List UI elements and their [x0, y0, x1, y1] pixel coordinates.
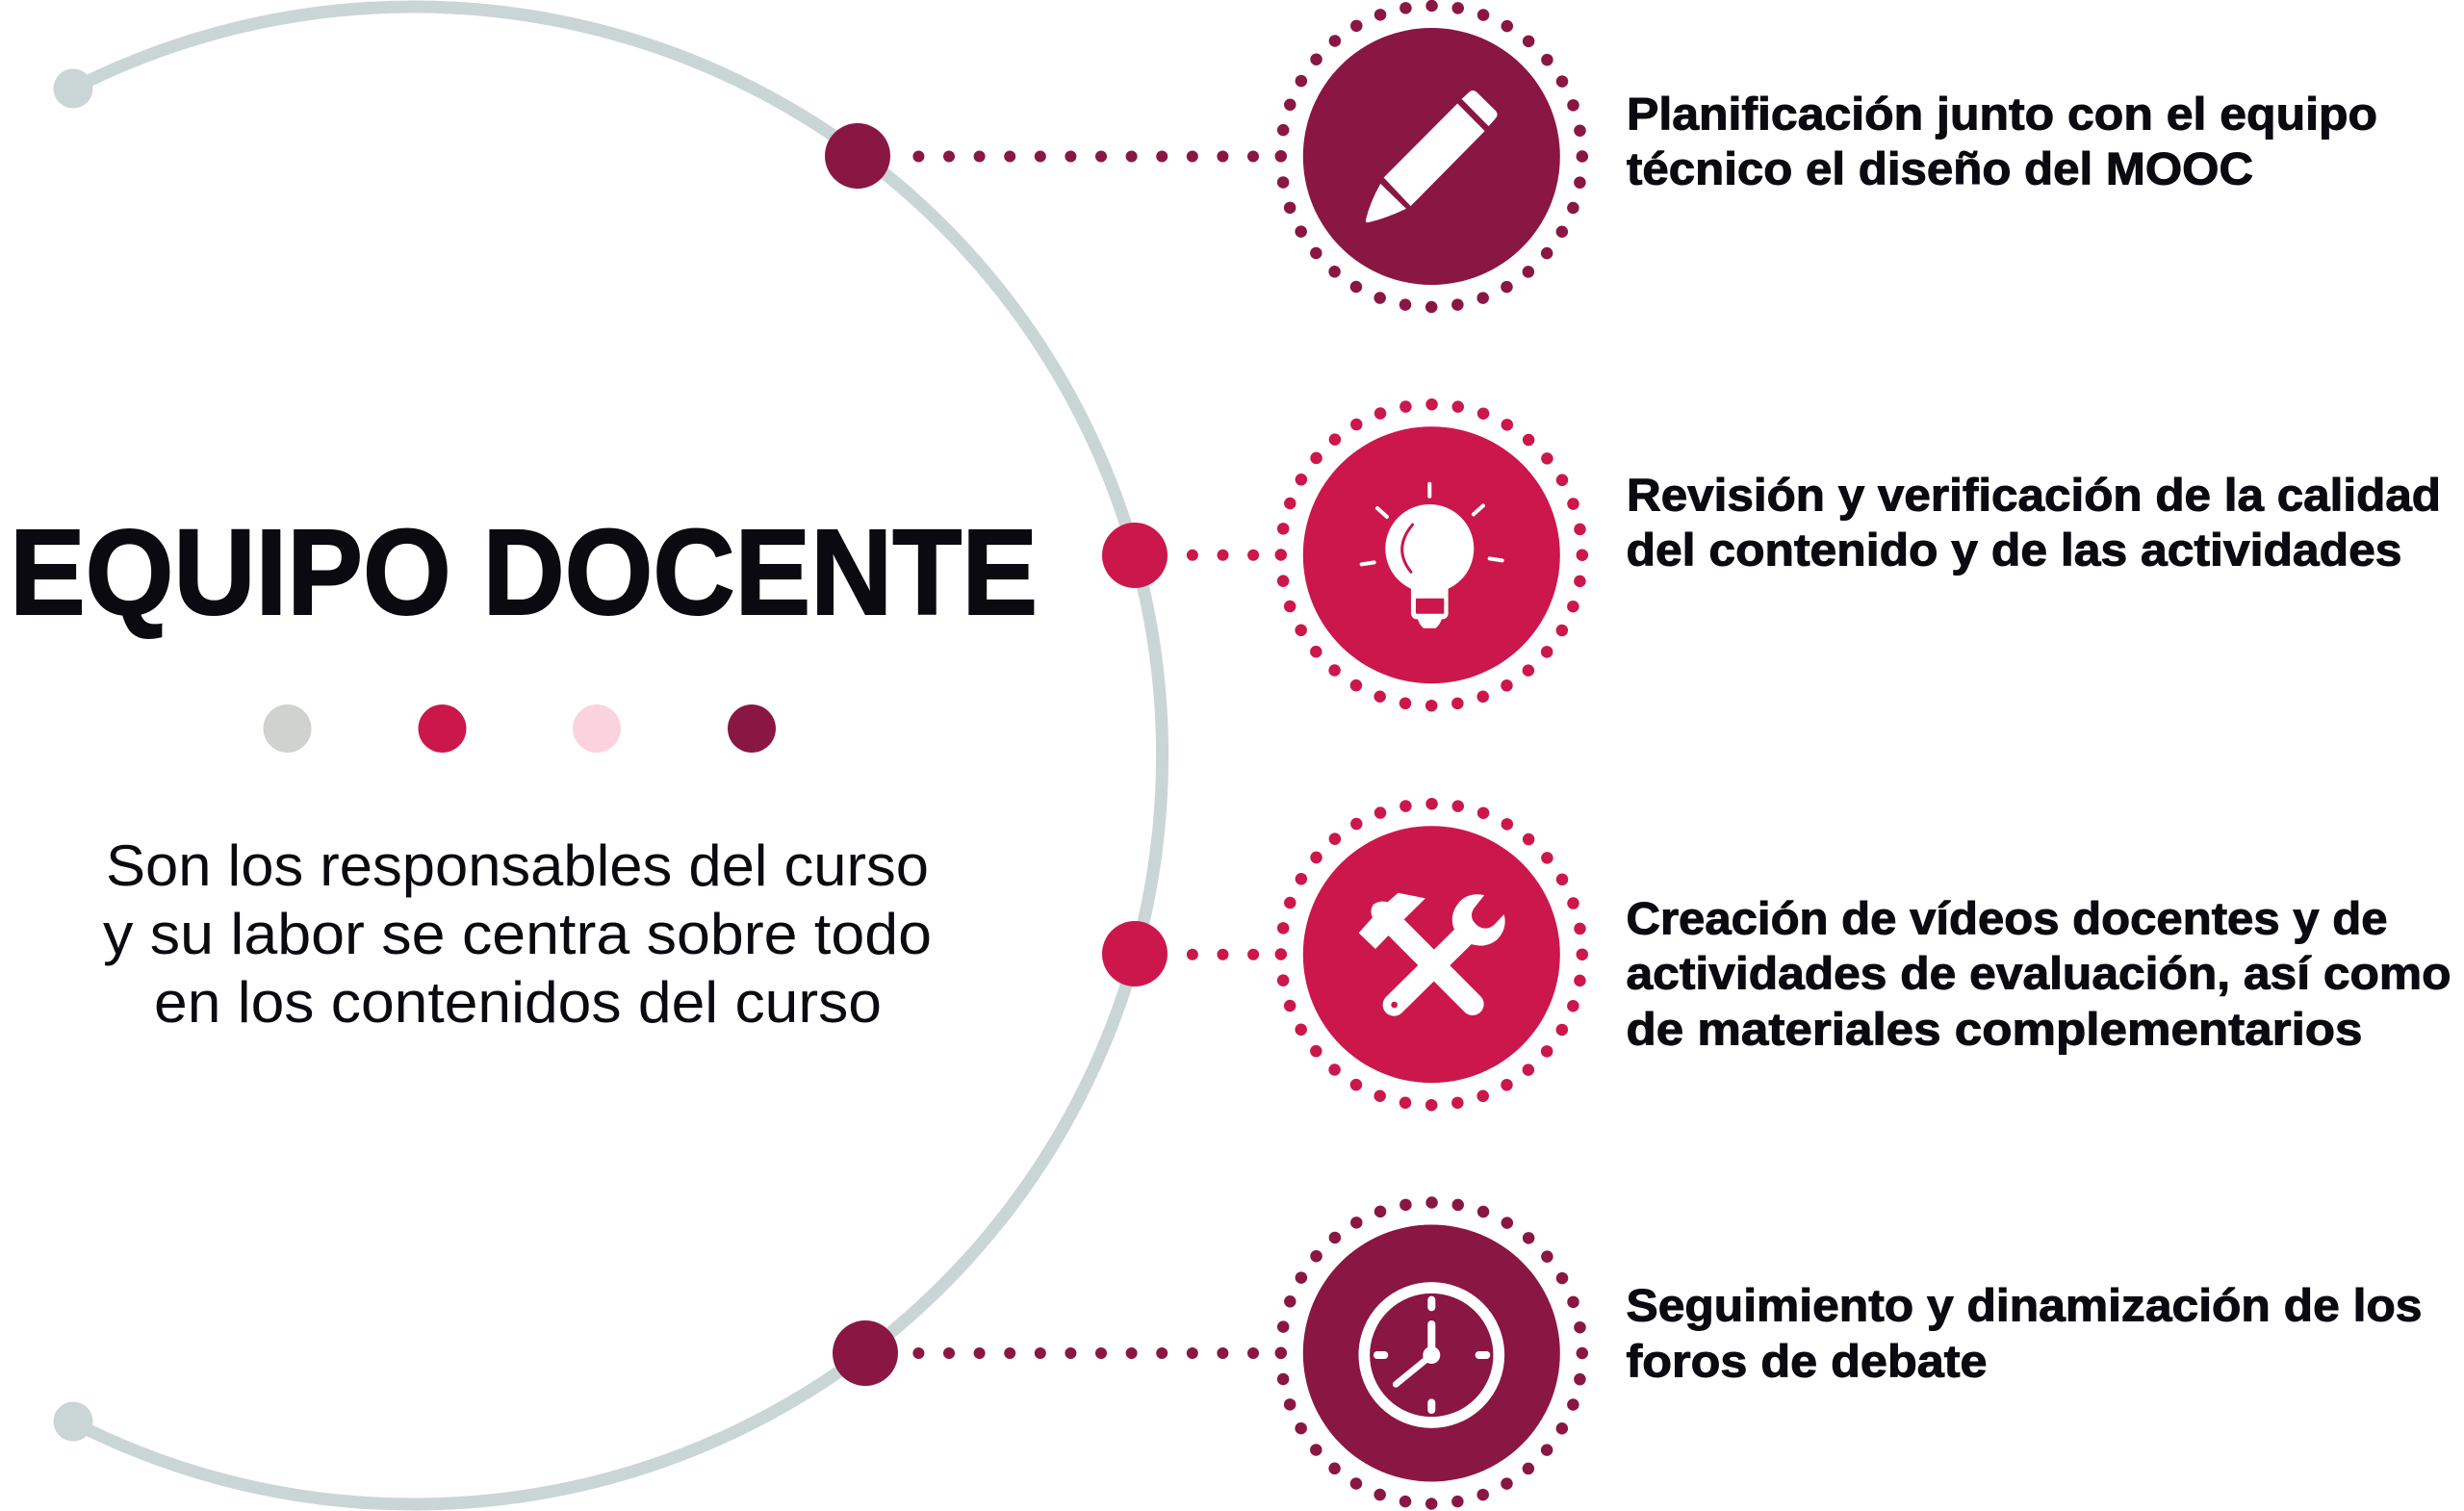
icon: clock [1281, 1203, 1582, 1503]
panel: step 3 creation [1102, 804, 2451, 1105]
text: step 2 [1627, 470, 2441, 576]
description text [103, 833, 932, 1035]
panel: step 2 review [1102, 404, 2441, 705]
icon: pencil [1281, 6, 1582, 307]
text: step 3: de materiales complementarios [1627, 1003, 2362, 1055]
description text: en los contenidos del curso [154, 970, 882, 1035]
text: step 4: foros de debate [1627, 1336, 1987, 1386]
text: step 2: del contenido y de las actividades [1627, 524, 2402, 576]
text: step 3: actividades de evaluación, así como [1627, 947, 2451, 999]
icon: light bulb [1281, 404, 1582, 705]
text: step 3 [1627, 893, 2451, 1055]
node and connector 3 [1102, 921, 1255, 986]
node and connector 2 [1102, 523, 1255, 588]
panel: step 1 planning [825, 6, 2377, 307]
text: step 4: Seguimiento y dinamización de los [1627, 1280, 2422, 1330]
description text: y su labor se centra sobre todo [103, 902, 932, 966]
panel: step 4 follow-up [833, 1203, 2422, 1503]
title: EQUIPO DOCENTE [10, 504, 1038, 640]
text: step 1 [1627, 89, 2377, 194]
description text: Son los responsables del curso [106, 833, 929, 898]
icon: hammer and wrench [1281, 804, 1582, 1105]
text: step 1: técnico el diseño del MOOC [1627, 142, 2253, 194]
text: step 1: Planificación junto con el equipo [1627, 89, 2377, 139]
colour dots row [264, 704, 776, 753]
arc: timeline curve with end points [54, 7, 1163, 1504]
node and connector 1 [825, 123, 1255, 189]
node and connector 4 [833, 1320, 1255, 1386]
text: step 3: Creación de vídeos docentes y de [1627, 893, 2387, 943]
text: step 2: Revisión y verificación de la calidad [1627, 470, 2441, 520]
text: step 4 [1627, 1280, 2422, 1386]
